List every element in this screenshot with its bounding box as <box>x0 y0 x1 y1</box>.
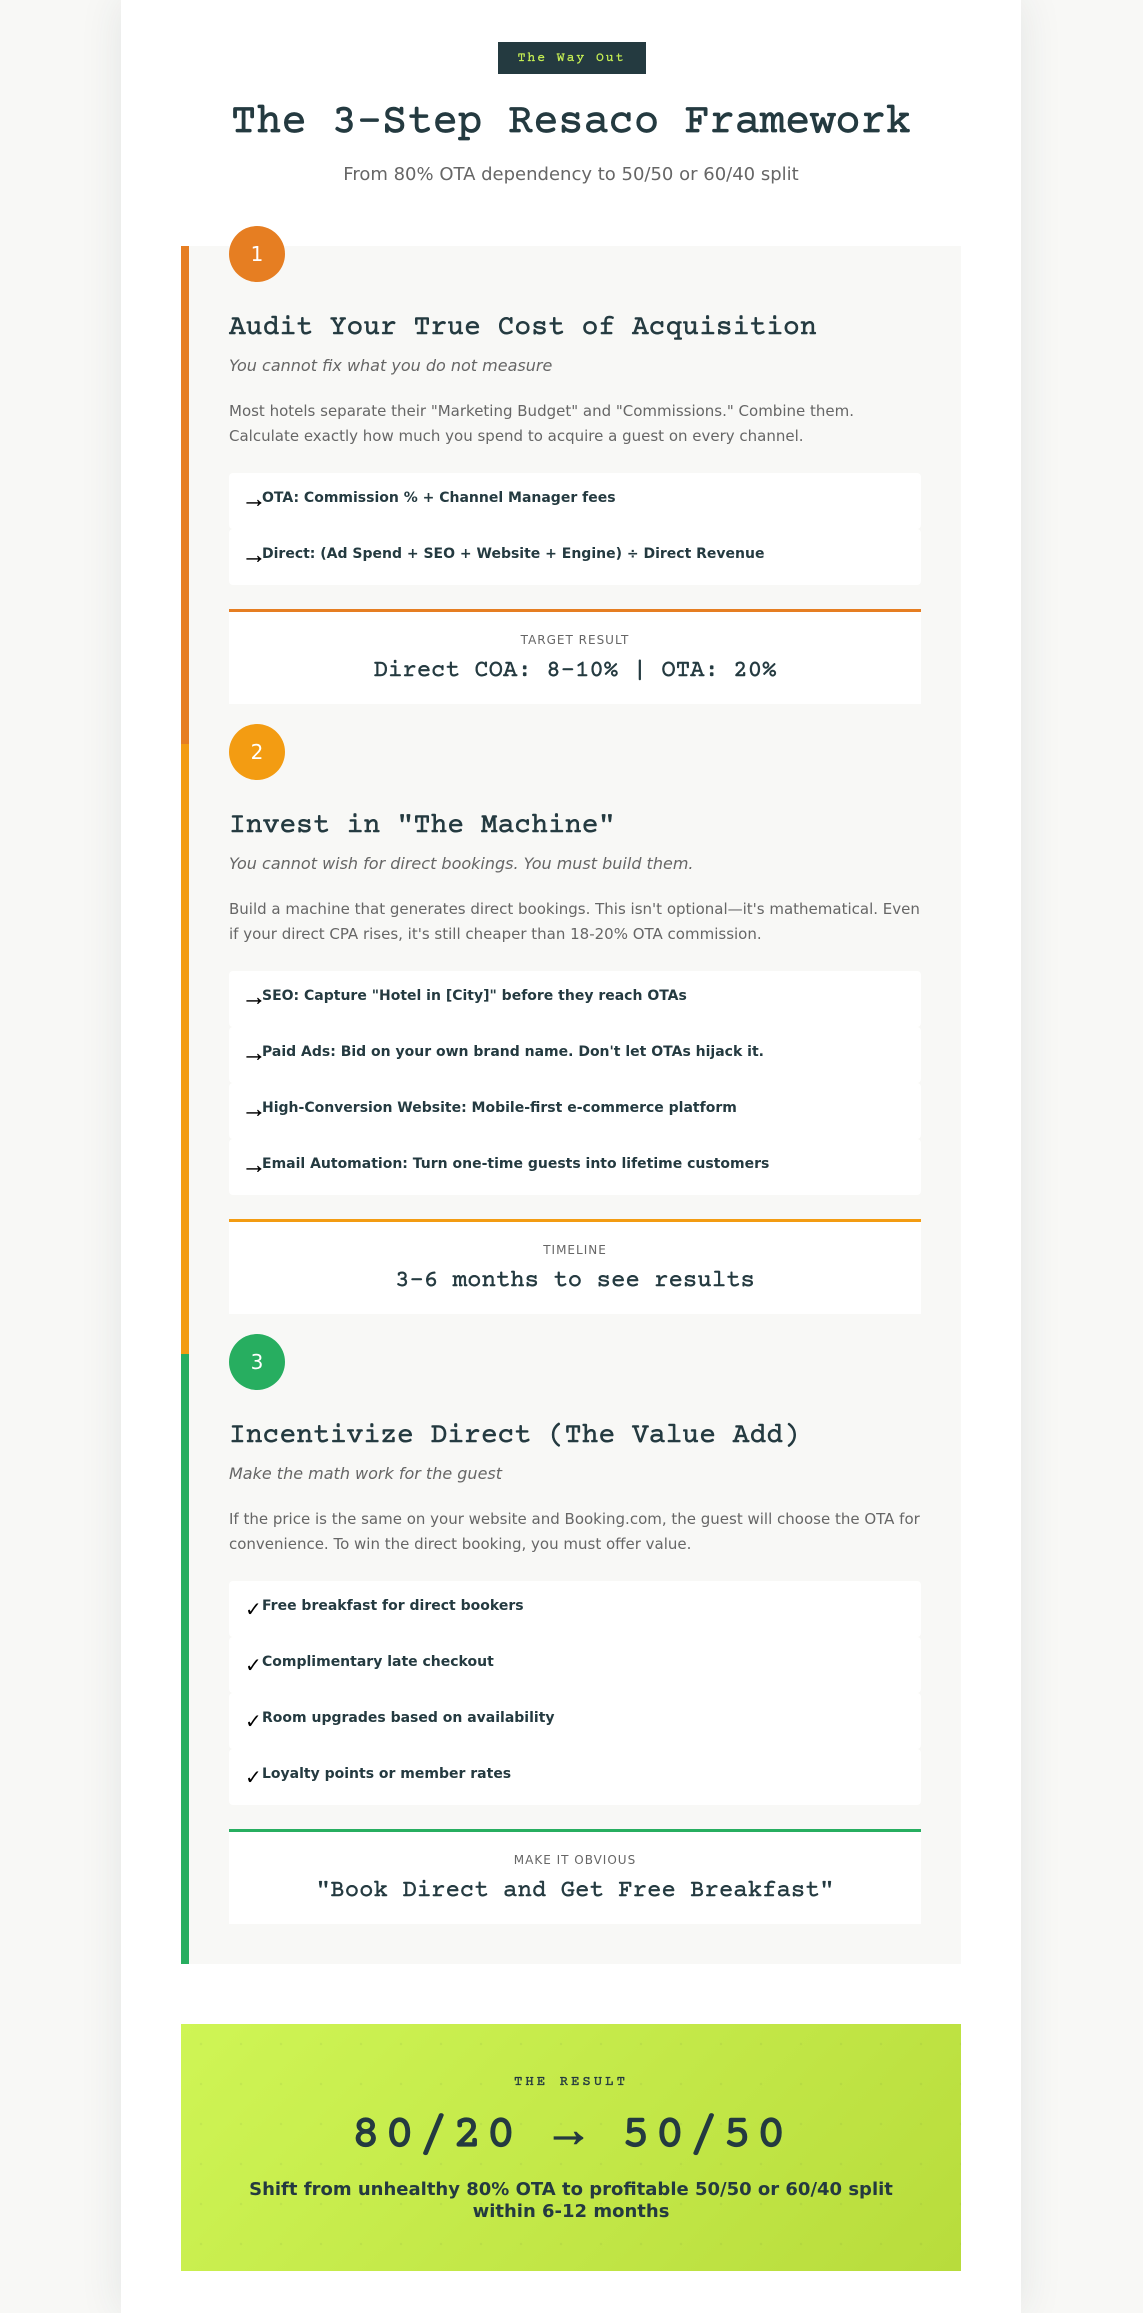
badge: The Way Out: The Way Out <box>518 52 625 66</box>
badge: The Way Out <box>498 42 646 74</box>
step 2 timeline <box>229 1219 921 1314</box>
step 2 number badge: 2 <box>251 740 263 764</box>
step 3 list: Loyalty points or member rates <box>262 1766 511 1782</box>
panel: step 3 <box>181 1354 961 1964</box>
page card <box>121 0 1021 2313</box>
step 3 make it obvious: "Book Direct and Get Free Breakfast" <box>316 1878 834 1905</box>
step 2 list: → <box>242 1152 266 1179</box>
step 3 heading: Incentivize Direct (The Value Add) <box>229 1420 800 1452</box>
step 1 list: → <box>242 542 266 569</box>
step 2 list: Paid Ads: Bid on your own brand name. Don't let OTAs hijack it. <box>262 1044 764 1060</box>
step 1 description <box>229 402 854 445</box>
step 1 description: Calculate exactly how much you spend to acquire a guest on every channel. <box>229 427 804 445</box>
step 1 number badge <box>229 226 285 282</box>
step 3 list: ✓ <box>245 1653 262 1677</box>
step 2 description <box>229 900 920 943</box>
step 2 tagline: You cannot wish for direct bookings. You must build them. <box>229 854 693 873</box>
step 1 list <box>229 473 921 585</box>
step 1 target result <box>229 609 921 704</box>
step 2 list: High-Conversion Website: Mobile-first e-commerce platform <box>262 1100 737 1116</box>
step 1 target result: Direct COA: 8-10% | OTA: 20% <box>374 658 776 685</box>
step 3 make it obvious <box>229 1829 921 1924</box>
step 3 tagline: Make the math work for the guest <box>229 1464 502 1483</box>
step 3 list: ✓ <box>245 1709 262 1733</box>
step 1 heading: Audit Your True Cost of Acquisition <box>229 312 817 344</box>
step 1 target result: TARGET RESULT <box>521 633 629 647</box>
result label: THE RESULT <box>514 2074 628 2090</box>
step 3 list: ✓ <box>245 1597 262 1621</box>
step 1 number badge: 1 <box>251 242 263 266</box>
step 3 list: ✓ <box>245 1765 262 1789</box>
step 2 number badge <box>229 724 285 780</box>
step 3 list: Room upgrades based on availability <box>262 1710 555 1726</box>
step 2 colour bar <box>181 744 189 1354</box>
panel: step 1 <box>181 246 961 744</box>
step 2 list: → <box>242 1040 266 1067</box>
step 3 list <box>229 1581 921 1805</box>
step 2 list: SEO: Capture "Hotel in [City]" before they reach OTAs <box>262 988 687 1004</box>
step 1 colour bar <box>181 246 189 744</box>
result description: Shift from unhealthy 80% OTA to profitable 50/50 or 60/40 split <box>249 2179 893 2200</box>
step 3 description: If the price is the same on your website and Booking.com, the guest will choose the OTA for <box>229 1510 920 1528</box>
step 1 description: Most hotels separate their "Marketing Budget" and "Commissions." Combine them. <box>229 402 854 420</box>
step 1 list: Direct: (Ad Spend + SEO + Website + Engine) ÷ Direct Revenue <box>262 546 764 562</box>
step 2 list: → <box>242 1096 266 1123</box>
step 3 description: convenience. To win the direct booking, you must offer value. <box>229 1535 691 1553</box>
step 2 heading: Invest in "The Machine" <box>229 810 615 842</box>
step 1 list: OTA: Commission % + Channel Manager fees <box>262 490 616 506</box>
step 3 list: Free breakfast for direct bookers <box>262 1598 524 1614</box>
panel: the result <box>181 2024 961 2271</box>
panel: step 2 <box>181 744 961 1354</box>
title: The 3-Step Resaco Framework <box>231 100 911 147</box>
step 2 list: → <box>242 984 266 1011</box>
step 3 number badge: 3 <box>251 1350 263 1374</box>
result figure: 80/20 → 50/50 <box>351 2109 791 2163</box>
step 2 timeline: TIMELINE <box>543 1243 607 1257</box>
step 1 list: → <box>242 486 266 513</box>
step 3 number badge <box>229 1334 285 1390</box>
result description: within 6-12 months <box>473 2201 669 2222</box>
result description <box>249 2179 893 2222</box>
step 2 list: Email Automation: Turn one-time guests into lifetime customers <box>262 1156 769 1172</box>
subtitle: From 80% OTA dependency to 50/50 or 60/40 split <box>343 164 799 185</box>
step 2 timeline: 3-6 months to see results <box>395 1268 755 1295</box>
step 1 tagline: You cannot fix what you do not measure <box>229 356 552 375</box>
step 3 list: Complimentary late checkout <box>262 1654 494 1670</box>
step 3 make it obvious: MAKE IT OBVIOUS <box>514 1853 636 1867</box>
step 2 description: if your direct CPA rises, it's still cheaper than 18-20% OTA commission. <box>229 925 762 943</box>
step 3 description <box>229 1510 920 1553</box>
step 2 description: Build a machine that generates direct bookings. This isn't optional—it's mathematical. Even <box>229 900 920 918</box>
step 3 colour bar <box>181 1354 189 1964</box>
step 2 list <box>229 971 921 1195</box>
